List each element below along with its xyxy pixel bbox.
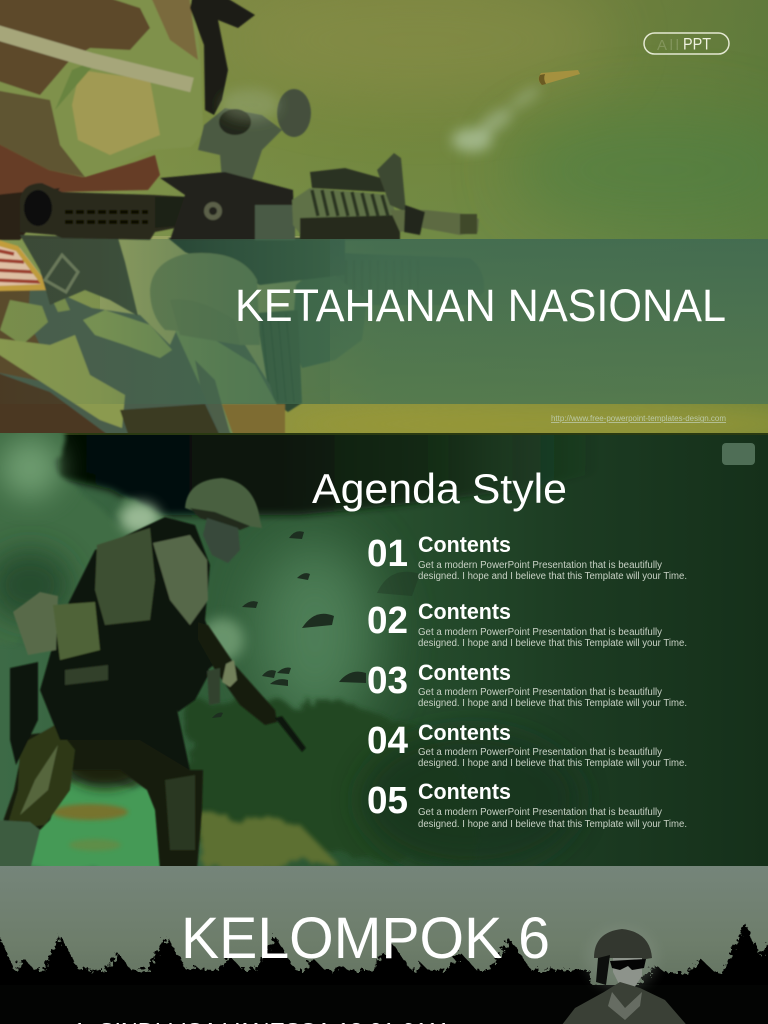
soldier portrait <box>558 926 691 1024</box>
flag patch <box>0 239 52 291</box>
receiver lower <box>168 238 345 285</box>
panel: title slide <box>0 0 768 444</box>
agenda item 05 <box>367 779 687 830</box>
forearm <box>174 669 209 712</box>
panel: group slide <box>0 866 768 1024</box>
rifle body <box>20 153 479 240</box>
agenda item 05: Get a modern PowerPoint Presentation that is beautifully <box>418 807 662 818</box>
agenda item 03: Contents <box>418 660 511 685</box>
agenda item 01: 01 <box>367 533 408 575</box>
agenda item 01: Contents <box>418 532 511 557</box>
logo: AllPPT <box>644 33 729 54</box>
glove <box>150 253 260 345</box>
heading: Agenda Style: Agenda Style <box>312 465 567 512</box>
camo sleeve <box>0 288 285 440</box>
agenda item 02: Get a modern PowerPoint Presentation that is beautifully <box>418 627 662 638</box>
agenda item 05: 05 <box>367 780 408 822</box>
rifle <box>198 622 306 752</box>
agenda item 01: designed. I hope and I believe that this Template will your Time. <box>418 571 687 582</box>
agenda item 04 <box>367 720 687 769</box>
agenda item 03: Get a modern PowerPoint Presentation that is beautifully <box>418 687 662 698</box>
backpack and pouches <box>13 592 58 655</box>
agenda item 02 <box>368 604 686 648</box>
parachutes <box>212 531 420 718</box>
soldier running with rifle <box>0 478 306 870</box>
agenda item 02: Contents <box>418 599 511 624</box>
agenda item 04: 04 <box>367 720 408 762</box>
agenda item 03: 03 <box>367 660 408 702</box>
logo: AllPPT: PPT <box>683 34 711 54</box>
soldier legs <box>3 732 204 866</box>
bullet smoke trail <box>452 83 543 152</box>
agenda item 04: designed. I hope and I believe that this Template will your Time. <box>418 758 687 769</box>
helmet <box>0 0 203 177</box>
rifle handguard <box>291 188 394 232</box>
heading: KELOMPOK 6: KELOMPOK 6 <box>181 906 550 971</box>
agenda item 04: Contents <box>418 720 511 745</box>
title: KETAHANAN NASIONAL <box>235 280 726 331</box>
decorative rounded tag <box>722 443 755 465</box>
agenda item 02: designed. I hope and I believe that this Template will your Time. <box>418 638 687 649</box>
panel: agenda slide <box>0 420 768 870</box>
second hand and grenade launcher <box>337 254 367 298</box>
agenda item 04: Get a modern PowerPoint Presentation that is beautifully <box>418 747 662 758</box>
website link: http://www.free-powerpoint-templates-design.com <box>551 414 726 423</box>
optic sight <box>198 89 311 180</box>
helmet <box>185 478 262 528</box>
rear and front sights <box>310 168 388 192</box>
icon: flying bullet <box>539 70 580 85</box>
agenda item 02: 02 <box>367 600 408 642</box>
face <box>203 518 240 563</box>
tree line silhouette <box>0 923 768 1024</box>
soldier shooting with rifle <box>0 0 484 440</box>
sling <box>20 235 138 316</box>
smoke clouds <box>0 425 580 870</box>
agenda item 01: Get a modern PowerPoint Presentation that is beautifully <box>418 560 662 571</box>
translucent title band <box>0 239 768 404</box>
rifle barrel <box>390 210 479 235</box>
agenda item 05: designed. I hope and I believe that this Template will your Time. <box>418 819 687 830</box>
agenda item 03: designed. I hope and I believe that this Template will your Time. <box>418 698 687 709</box>
neck and face <box>0 144 160 196</box>
helmet night vision mount <box>190 0 255 115</box>
agenda item 01 <box>368 536 686 581</box>
agenda item 05: Contents <box>418 779 511 804</box>
soldier torso <box>40 517 220 770</box>
logo: AllPPT: All <box>657 37 679 54</box>
helmet strap <box>0 32 192 85</box>
rifle magazine <box>256 310 302 412</box>
agenda item 03 <box>367 660 687 709</box>
